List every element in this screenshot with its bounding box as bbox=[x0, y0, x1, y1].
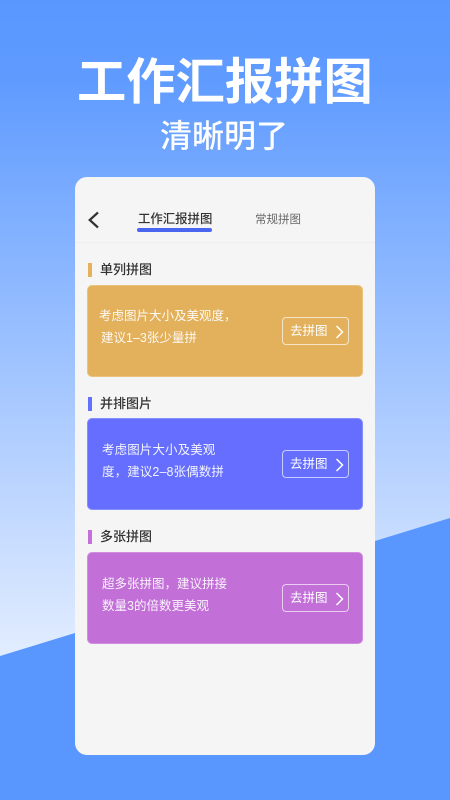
card: single column bbox=[87, 285, 363, 377]
icon: back arrow bbox=[88, 212, 99, 228]
tab underline bbox=[137, 228, 212, 232]
card text: side by side: 度，建议2–8张偶数拼 bbox=[102, 465, 224, 479]
title: 工作汇报拼图 bbox=[77, 55, 373, 110]
button: multiple bbox=[282, 584, 349, 612]
card text: multiple bbox=[102, 577, 227, 613]
card text: side by side bbox=[102, 443, 224, 479]
tab: inactive: 常规拼图 bbox=[255, 214, 301, 226]
button: side by side bbox=[282, 450, 349, 478]
section heading: multiple: 多张拼图 bbox=[100, 529, 152, 544]
card text: side by side: 考虑图片大小及美观 bbox=[102, 443, 215, 457]
card text: single column: 建议1–3张少量拼 bbox=[101, 331, 197, 345]
button: side by side: 去拼图 bbox=[290, 457, 328, 471]
section marker: single column bbox=[88, 263, 92, 277]
card: multiple bbox=[87, 552, 363, 644]
tab: active: 工作汇报拼图 bbox=[138, 212, 212, 226]
panel: phone screen bbox=[75, 177, 375, 755]
card text: multiple: 超多张拼图，建议拼接 bbox=[102, 577, 227, 591]
subtitle: 清晰明了 bbox=[160, 118, 288, 154]
header divider line bbox=[75, 242, 375, 243]
card text: multiple: 数量3的倍数更美观 bbox=[102, 599, 209, 613]
section heading: side by side: 并排图片 bbox=[100, 396, 152, 411]
section heading: single column: 单列拼图 bbox=[100, 262, 152, 277]
button: single column: 去拼图 bbox=[290, 324, 328, 338]
card: side by side bbox=[87, 418, 363, 510]
section marker: multiple bbox=[88, 530, 92, 544]
button: multiple: 去拼图 bbox=[290, 591, 328, 605]
card text: single column: 考虑图片大小及美观度， bbox=[99, 309, 237, 323]
button: single column bbox=[282, 317, 349, 345]
card text: single column bbox=[99, 309, 237, 345]
section marker: side by side bbox=[88, 397, 92, 411]
